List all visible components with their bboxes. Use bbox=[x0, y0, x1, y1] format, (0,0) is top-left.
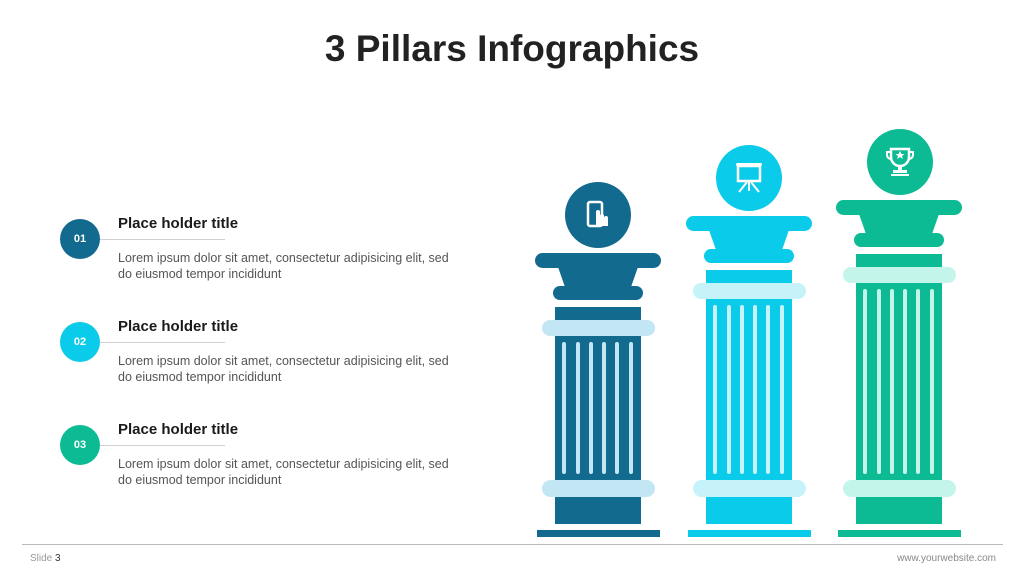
text 02: Lorem ipsum dolor sit amet, consectetur adipisicing elit, sed do eiusmod tempor incididunt bbox=[118, 354, 449, 384]
pillar 1 bbox=[535, 182, 661, 537]
badge 02: 02 bbox=[74, 336, 86, 348]
icon: touch phone bbox=[565, 182, 631, 248]
icon: trophy bbox=[867, 129, 933, 195]
footer slide number: Slide 3 bbox=[30, 553, 61, 564]
text 01: Lorem ipsum dolor sit amet, consectetur adipisicing elit, sed do eiusmod tempor incididunt bbox=[118, 251, 449, 281]
title: 3 Pillars Infographics bbox=[325, 28, 699, 69]
badge 02 bbox=[60, 322, 100, 362]
footer website: www.yourwebsite.com bbox=[897, 553, 996, 564]
pillar 3 bbox=[836, 129, 962, 537]
item 02 bbox=[60, 318, 449, 384]
text 03: Lorem ipsum dolor sit amet, consectetur adipisicing elit, sed do eiusmod tempor incididunt bbox=[118, 457, 449, 487]
pillar 2 bbox=[686, 145, 812, 537]
heading 01: Place holder title bbox=[118, 215, 238, 232]
badge 01: 01 bbox=[74, 233, 86, 245]
heading 03: Place holder title bbox=[118, 421, 238, 438]
item 03 bbox=[60, 421, 449, 487]
icon: presentation board bbox=[716, 145, 782, 211]
heading 02: Place holder title bbox=[118, 318, 238, 335]
badge 03 bbox=[60, 425, 100, 465]
badge 03: 03 bbox=[74, 439, 86, 451]
item 01 bbox=[60, 215, 449, 281]
badge 01 bbox=[60, 219, 100, 259]
